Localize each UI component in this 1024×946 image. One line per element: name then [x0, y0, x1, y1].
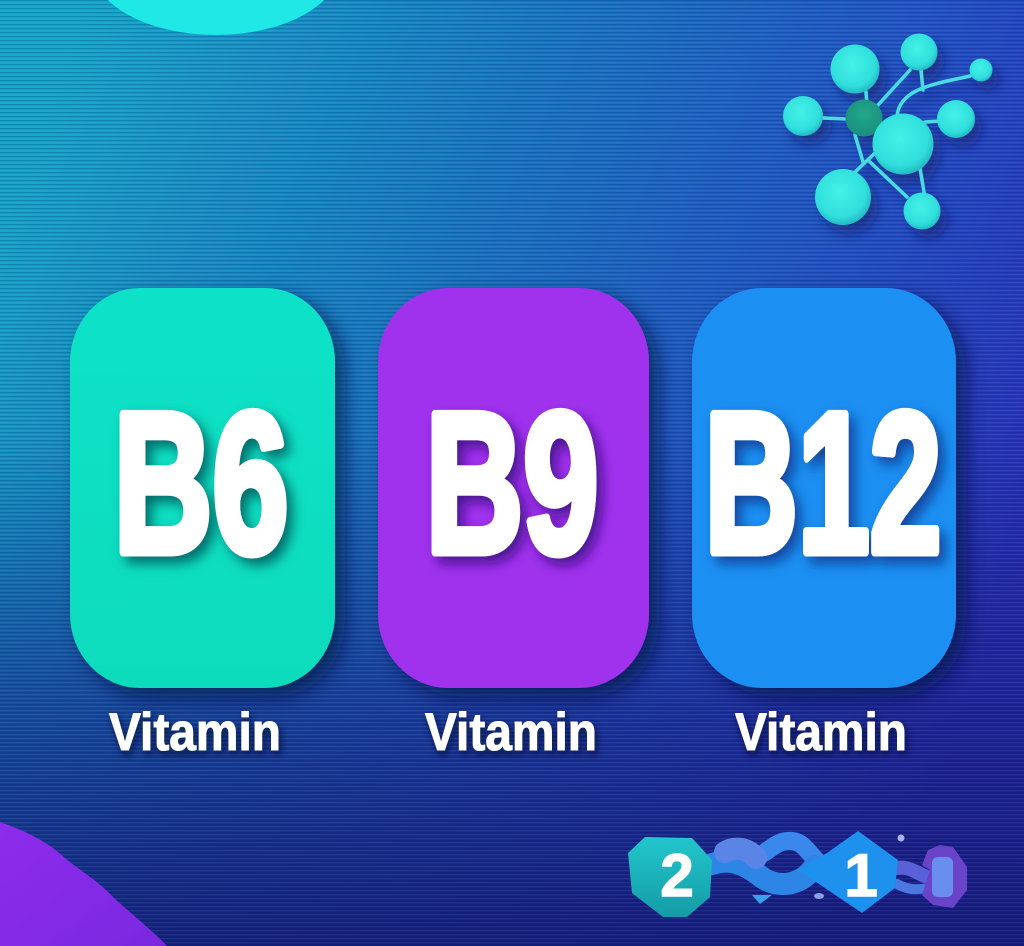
atoms [783, 34, 992, 230]
chain fragments [752, 895, 772, 904]
panel: vitamin B9 [378, 288, 649, 762]
icon: molecule network [783, 34, 992, 230]
decorative teal glow at top [91, 0, 341, 35]
heading: B6: B6 [114, 372, 288, 595]
panel: vitamin B12 [692, 288, 956, 762]
badge: number 1 [797, 831, 898, 913]
badge: number 2 [628, 837, 712, 917]
hub atom [846, 100, 882, 136]
icon: chain with numbers 2 and 1 [628, 831, 967, 917]
card: B6 [70, 288, 335, 688]
panel: vitamin B6 [70, 288, 335, 762]
label: Vitamin: Vitamin [109, 703, 281, 762]
card: B12 [692, 288, 956, 688]
chain links [712, 841, 928, 889]
heading: B9: B9 [426, 372, 598, 595]
number 2: 2 [660, 842, 694, 909]
decorative purple blob at bottom left [0, 822, 167, 946]
end link [922, 845, 967, 908]
label: Vitamin: Vitamin [735, 703, 907, 762]
card: B9 [378, 288, 649, 688]
number 1: 1 [844, 842, 878, 909]
label: Vitamin: Vitamin [425, 703, 597, 762]
